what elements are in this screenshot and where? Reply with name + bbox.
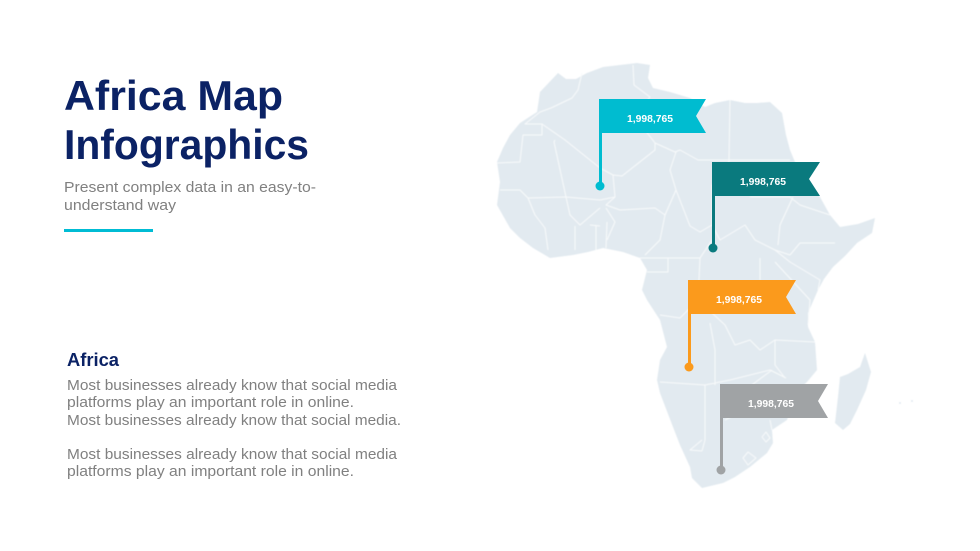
Madagascar	[835, 353, 871, 430]
title	[64, 72, 309, 168]
flag: teal-blue marker: 1,998,765	[627, 113, 673, 125]
small islands	[899, 400, 913, 404]
flag: dark teal marker: 1,998,765	[740, 176, 786, 188]
title: Africa Map	[64, 72, 283, 119]
subtitle: understand way	[64, 197, 177, 214]
body text: Most businesses already know that social media.	[67, 412, 401, 429]
map: Africa	[497, 63, 913, 488]
section heading: Africa: Africa	[67, 350, 120, 370]
body text: platforms play an important role in online.	[67, 463, 354, 480]
flag: teal-blue marker	[596, 99, 706, 190]
flag: grey marker	[716, 384, 828, 474]
body text: Most businesses already know that social media	[67, 377, 398, 394]
country borders	[497, 65, 835, 465]
body text: platforms play an important role in online.	[67, 394, 354, 411]
flag: orange marker: 1,998,765	[716, 294, 762, 306]
mainland silhouette	[497, 63, 875, 488]
title underline accent	[64, 229, 153, 232]
flag: grey marker: 1,998,765	[748, 398, 794, 410]
flag: dark teal marker	[708, 162, 820, 252]
subtitle: Present complex data in an easy-to-	[64, 179, 316, 196]
body text: Most businesses already know that social media	[67, 446, 398, 463]
subtitle	[64, 179, 316, 214]
body text	[67, 377, 401, 480]
title: Infographics	[64, 121, 309, 168]
flag: orange marker	[684, 280, 796, 372]
